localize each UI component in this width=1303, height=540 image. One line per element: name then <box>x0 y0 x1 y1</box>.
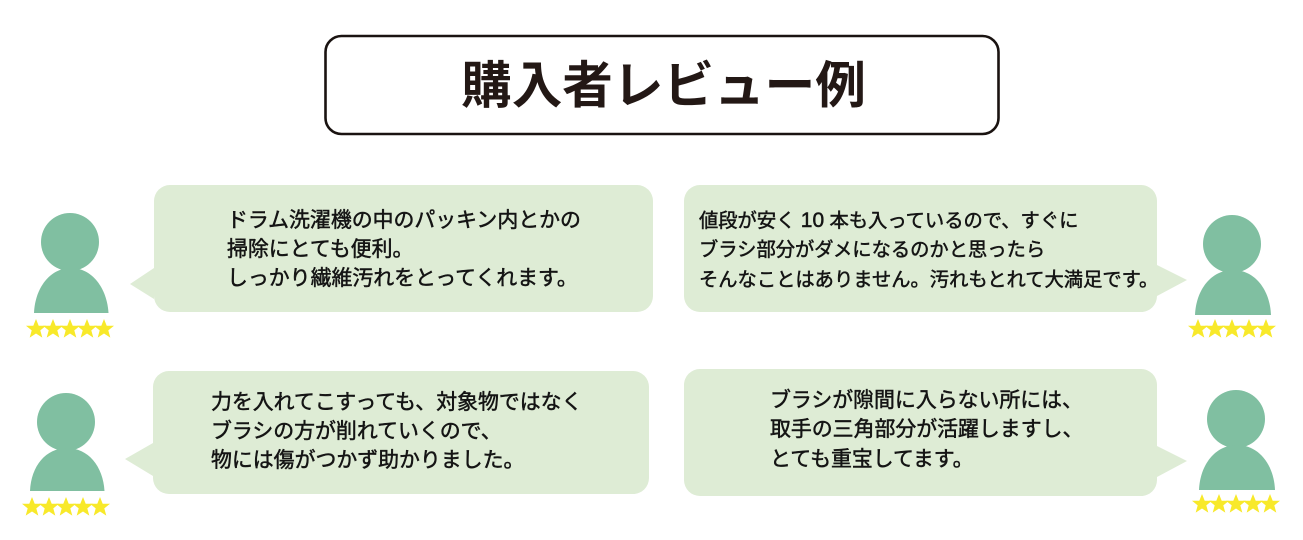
icon: five stars <box>1188 319 1276 338</box>
review text: しっかり繊維汚れをとってくれます。 <box>227 267 578 290</box>
review text <box>699 209 1158 291</box>
speech bubble <box>130 185 653 312</box>
title <box>326 36 998 134</box>
icon: five stars <box>1192 494 1280 513</box>
review text: ブラシが隙間に入らない所には、 <box>770 389 1083 412</box>
icon: reviewer <box>30 393 104 491</box>
review card: bottom left <box>22 371 649 516</box>
review text: とても重宝してます。 <box>770 448 973 471</box>
review text: ブラシの方が削れていくので、 <box>211 420 502 443</box>
review text <box>770 389 1083 471</box>
review text: 値段が安く 10 本も入っているので、すぐに <box>699 209 1078 232</box>
review text: 取手の三角部分が活躍しますし、 <box>770 418 1083 441</box>
icon: five stars <box>26 319 114 338</box>
speech bubble <box>125 371 649 494</box>
icon: five stars <box>22 497 110 516</box>
review text <box>227 209 581 290</box>
review text: 物には傷がつかず助かりました。 <box>211 449 524 472</box>
speech bubble <box>684 185 1187 312</box>
review text <box>211 391 582 472</box>
icon: reviewer <box>1199 390 1275 490</box>
speech bubble <box>684 369 1187 496</box>
title: 購入者レビュー例 <box>461 57 866 114</box>
review text: そんなことはありません。汚れもとれて大満足です。 <box>699 269 1158 291</box>
review text: ブラシ部分がダメになるのかと思ったら <box>699 238 1045 261</box>
review text: 掃除にとても便利。 <box>227 238 413 261</box>
review text: ドラム洗濯機の中のパッキン内とかの <box>227 209 581 232</box>
icon: reviewer <box>1195 215 1271 315</box>
review card: bottom right <box>684 369 1280 513</box>
review text: 力を入れてこすっても、対象物ではなく <box>211 391 582 414</box>
review card: top left <box>26 185 653 338</box>
icon: reviewer <box>34 213 108 313</box>
review card: top right <box>684 185 1276 338</box>
